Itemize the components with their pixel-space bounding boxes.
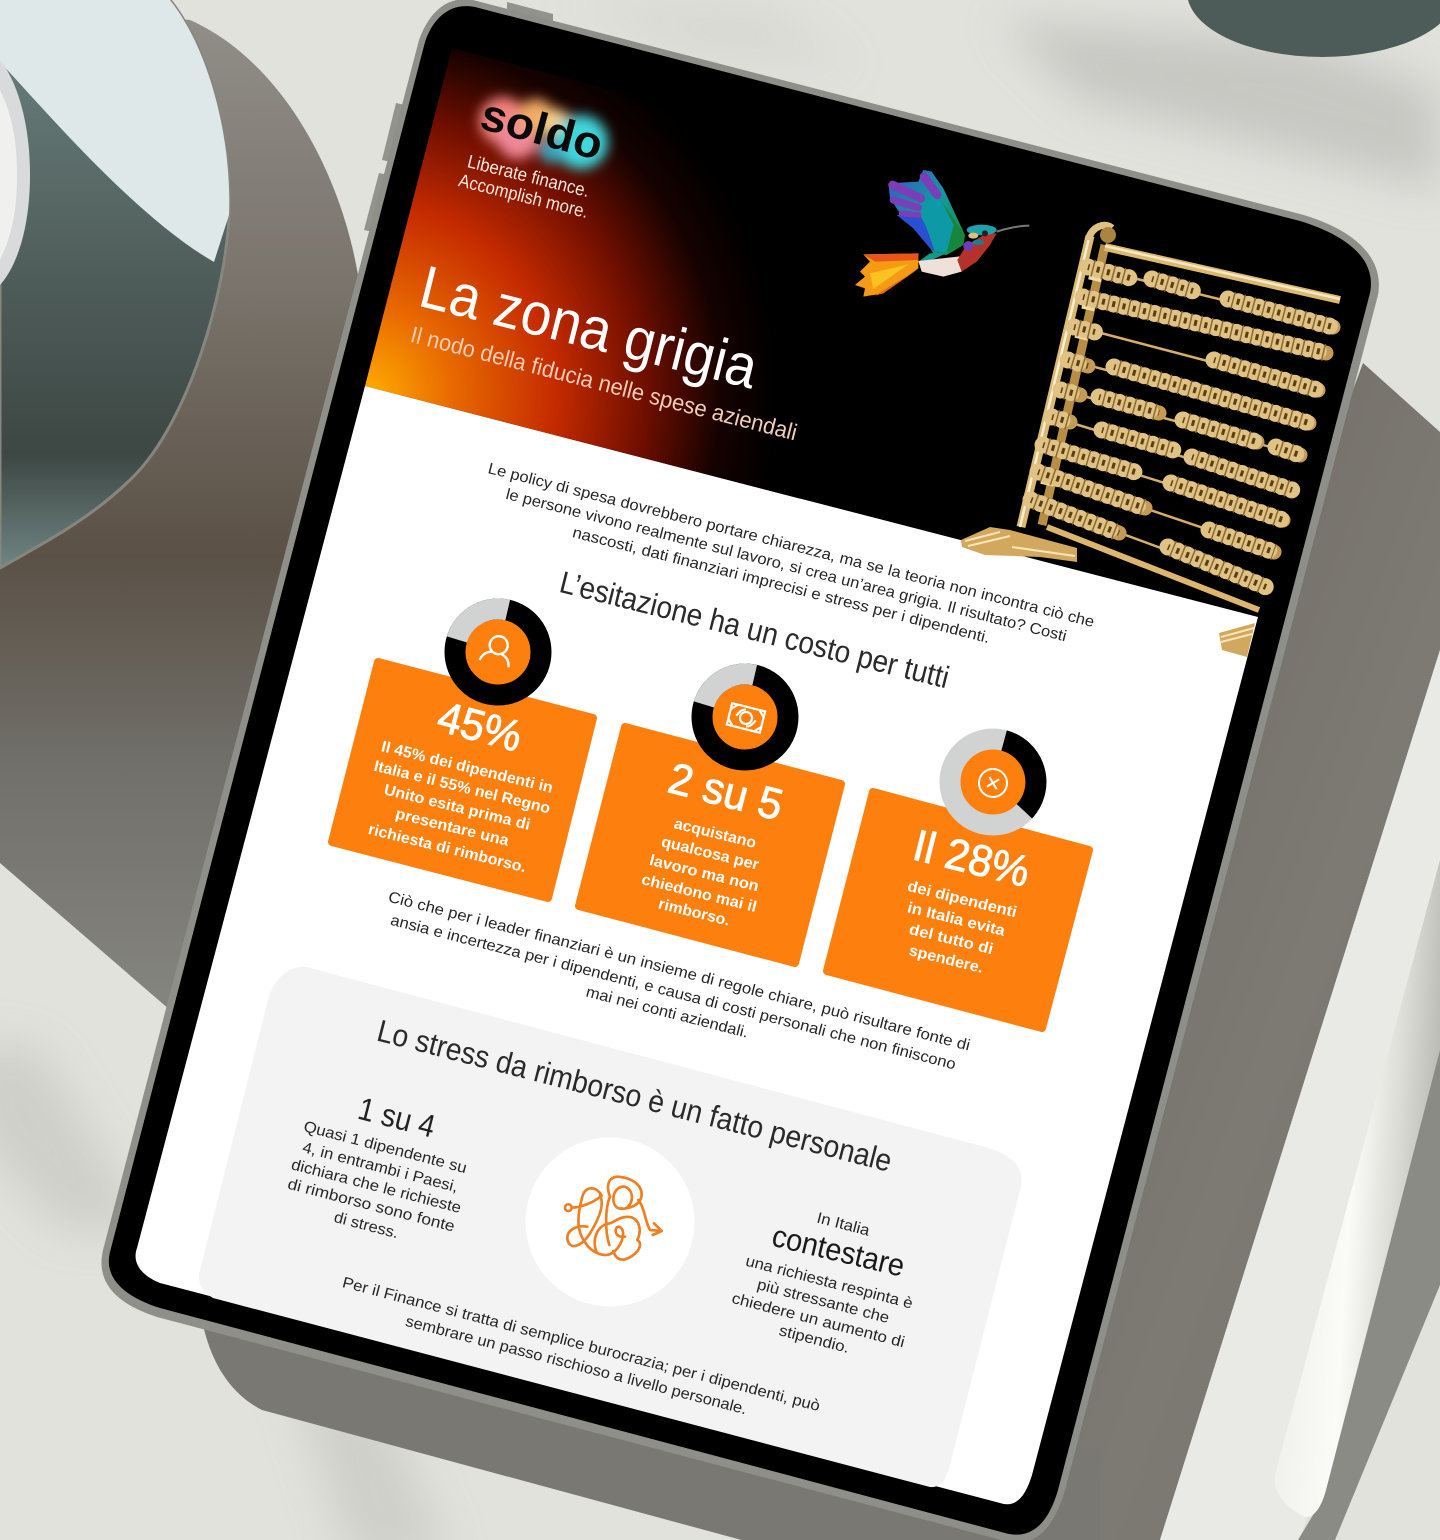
right column text: più stressante che xyxy=(755,1276,891,1327)
card 3 text: dei dipendenti xyxy=(906,878,1018,921)
abacus xyxy=(961,225,1340,657)
stat 28%: Il 28% xyxy=(908,821,1035,897)
heading: stress: Lo stress da rimborso è un fatto personale xyxy=(374,1013,896,1179)
left column text: di rimborso sono fonte xyxy=(286,1176,456,1236)
plate shadow on the left xyxy=(0,0,358,1010)
subtitle: Il nodo della fiducia nelle spese aziendali xyxy=(408,321,800,445)
panel: reimbursement stress xyxy=(199,967,1022,1487)
left column text: 4, in entrambi i Paesi, xyxy=(301,1139,460,1196)
card 3 text xyxy=(905,878,1018,977)
paragraph below cards: mai nei conti aziendali. xyxy=(584,984,750,1042)
card 3 text: del tutto di xyxy=(907,921,995,958)
heading: hesitation: L’esitazione ha un costo per tutti xyxy=(556,564,953,695)
light strip under stylus xyxy=(1160,650,1440,1540)
tablet shadow, bottom xyxy=(203,1325,1100,1540)
right column text: In Italia xyxy=(815,1210,872,1240)
card 2 text xyxy=(640,815,761,930)
tagline: Accomplish more. xyxy=(457,169,591,222)
card 1 text: Il 45% dei dipendenti in xyxy=(380,738,555,797)
stylus xyxy=(1275,860,1440,1517)
icon: banknote xyxy=(727,703,765,733)
logo: soldo: soldo xyxy=(476,88,608,170)
card 2 text: chiedono mai il xyxy=(640,871,758,916)
card 2 text: acquistano xyxy=(672,815,758,852)
abacus second foot xyxy=(1219,623,1255,657)
card 1 text xyxy=(366,738,555,876)
left column text xyxy=(286,1118,469,1242)
card 1 text: Italia e il 55% nel Regno xyxy=(372,758,552,817)
abacus foot xyxy=(961,527,1077,562)
abacus rods xyxy=(1031,267,1333,587)
icon: cancel circle xyxy=(976,766,1010,800)
card 1 text: Unito esita prima di xyxy=(382,781,532,834)
dark vessel, top right xyxy=(1187,0,1440,57)
card 3 text: spendere. xyxy=(907,942,985,977)
left column text: Quasi 1 dipendente su xyxy=(302,1118,469,1177)
panel: card 1 xyxy=(332,609,593,898)
stat 1 su 4: 1 su 4 xyxy=(354,1090,439,1144)
tagline: Liberate finance. xyxy=(465,150,592,201)
tablet shadow, right side xyxy=(1000,363,1440,1540)
panel: card 2 xyxy=(579,674,841,963)
card 2 text: qualcosa per xyxy=(659,833,761,874)
right column text: chiedere un aumento di xyxy=(730,1290,906,1351)
paragraph below cards: ansia e incertezza per i dipendenti, e causa di costi personali che non finiscono xyxy=(389,912,958,1073)
right column text: contestare xyxy=(769,1218,908,1284)
title: La zona grigia xyxy=(413,253,765,401)
stat 45%: 45% xyxy=(432,692,527,762)
panel: card 3 xyxy=(827,739,1089,1028)
donut 1 xyxy=(455,609,541,695)
card 3 text: in Italia evita xyxy=(905,899,1007,940)
stylus shadow band xyxy=(1298,1040,1440,1540)
tablet side buttons xyxy=(364,2,553,232)
abacus frame post xyxy=(1020,225,1116,527)
left column text: dichiara che le richieste xyxy=(289,1156,463,1217)
card 2 text: lavoro ma non xyxy=(648,852,760,895)
paragraph below cards: Ciò che per i leader finanziari è un insieme di regole chiare, può risultare fonte di xyxy=(386,889,972,1054)
donut 3 xyxy=(950,739,1036,825)
left column text: di stress. xyxy=(332,1209,400,1242)
intro paragraph: Le policy di spesa dovrebbero portare chiarezza, ma se la teoria non incontra ciò che xyxy=(486,460,1096,631)
intro paragraph: le persone vivono realmente sul lavoro, si crea un’area grigia. Il risultato? Costi xyxy=(504,486,1068,645)
right column text: una richiesta respinta è xyxy=(744,1253,914,1313)
glass plate xyxy=(0,0,229,568)
card 1 text: richiesta di rimborso. xyxy=(366,821,528,876)
closing text: Per il Finance si tratta di semplice burocrazia; per i dipendenti, può xyxy=(340,1274,822,1415)
intro paragraph: nascosti, dati finanziari imprecisi e stress per i dipendenti. xyxy=(571,524,992,647)
logo glow xyxy=(479,97,608,169)
icon: person xyxy=(480,633,515,667)
closing text: sembrare un passo rischioso a livello personale. xyxy=(404,1313,749,1418)
white circle with tangled line icon xyxy=(526,1138,694,1306)
abacus rails xyxy=(1105,247,1340,300)
tagline xyxy=(457,150,592,222)
stat 2 su 5: 2 su 5 xyxy=(663,754,788,830)
right column text: stipendio. xyxy=(777,1322,851,1357)
card 1 text: presentare una xyxy=(394,806,511,850)
header gradient xyxy=(365,48,800,499)
hummingbird xyxy=(855,170,1029,297)
screen: white page xyxy=(136,386,1258,1504)
donut 2 xyxy=(702,674,788,760)
right column text xyxy=(730,1210,914,1357)
card 2 text: rimborso. xyxy=(657,896,732,930)
abacus beads xyxy=(1031,267,1333,587)
